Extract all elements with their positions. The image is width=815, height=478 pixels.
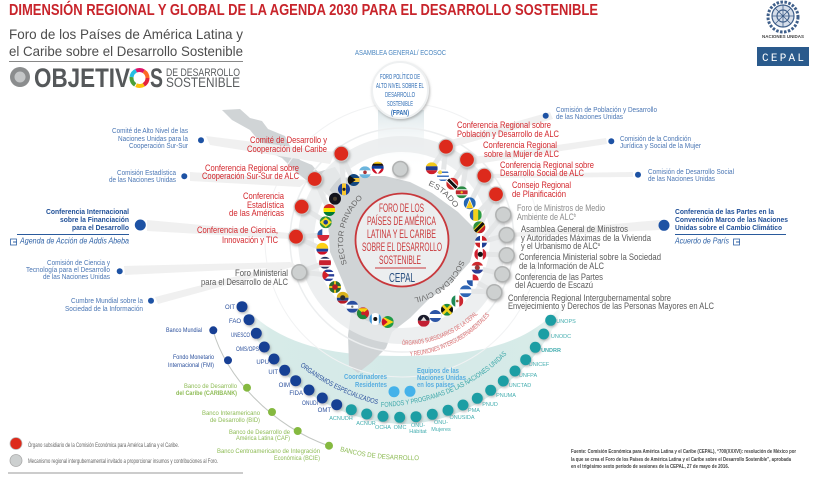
left blue labels: Comisión de Ciencia y xyxy=(47,260,110,267)
flags of member countries: right arc xyxy=(418,162,487,327)
left blue labels: Naciones Unidas para la xyxy=(118,136,188,143)
connecting rays to global bodies xyxy=(124,112,660,304)
grey labels: right: y Autoridades Máximas de la Vivienda xyxy=(521,233,652,244)
red labels: right: Población y Desarrollo de ALC xyxy=(457,129,559,140)
labels: fondos y programas: FONDOS Y PROGRAMAS DE LAS NACIONES UNIDAS xyxy=(381,352,506,407)
left blue labels: Comisión Estadística xyxy=(117,170,176,177)
right blue labels: Comisión de Desarrollo Social xyxy=(648,169,734,176)
red labels: left: Conferencia Regional sobre xyxy=(205,163,299,174)
spokes from flags to nodes xyxy=(296,147,507,292)
grey labels: right: y el Urbanismo de ALC xyxy=(521,241,618,252)
grey labels: right: b xyxy=(574,213,576,219)
callout: Conferencia Internacional sobre la Financiación xyxy=(10,207,129,246)
FPAN circle: DESARROLLO xyxy=(385,90,415,99)
callout: Conferencia Internacional sobre la Financiación: para el Desarrollo xyxy=(72,223,129,232)
labels: bancos de desarrollo: de Desarrollo (BID) xyxy=(210,417,260,424)
labels: coordinadores y equipos: Equipos de las xyxy=(417,366,459,375)
labels: bancos de desarrollo: Fondo Monetario xyxy=(173,355,215,361)
labels: fondos y programas xyxy=(329,319,576,435)
grey labels: right: Conferencia de las Partes xyxy=(515,272,603,283)
label: Asamblea General / ECOSOC: ASAMBLEA GENERAL/ ECOSOC xyxy=(355,50,446,57)
flags of member countries: left arc xyxy=(316,162,394,328)
grey labels: right: Conferencia Regional Intergubernamental sobre xyxy=(508,293,671,304)
labels: organismos especializados: OMT xyxy=(318,408,331,414)
red nodes: órganos subsidiarios xyxy=(288,139,504,244)
labels: fondos y programas: OMC xyxy=(394,425,406,431)
FPAN band xyxy=(378,110,424,170)
grey labels: right: a xyxy=(598,242,600,248)
logo: CEPAL: CEPAL xyxy=(762,53,804,65)
FPAN circle: FORO POLÍTICO DE xyxy=(380,72,420,81)
logo: CEPAL xyxy=(757,47,809,66)
labels: coordinadores y equipos: Residentes xyxy=(355,380,387,389)
labels: fondos y programas: ONUSIDA xyxy=(449,415,475,421)
source note xyxy=(571,449,797,470)
central circle: Foro de los Países xyxy=(356,194,448,286)
subtitle: el Caribe sobre el Desarrollo Sostenible xyxy=(9,43,243,59)
red labels: left: Comité de Desarrollo y xyxy=(250,135,327,146)
labels: fondos y programas: UNICEF xyxy=(529,362,550,368)
grey label: Foro Ministerial xyxy=(201,268,288,288)
right blue labels: de las Naciones Unidas xyxy=(648,176,715,183)
grey labels: right: de la Información de ALC xyxy=(519,261,604,272)
logo: objetivos de desarrollo sostenible: S xyxy=(150,63,163,93)
labels: organismos especializados: ONUDI xyxy=(302,401,318,407)
bank nodes xyxy=(209,326,333,450)
small blue dots: global bodies xyxy=(117,113,669,304)
right blue labels: Comisión de Población y Desarrollo xyxy=(556,107,657,114)
left blue labels: Cumbre Mundial sobre la xyxy=(71,298,143,305)
central circle: Foro de los Países: PAÍSES DE AMÉRICA xyxy=(367,213,436,228)
right blue labels: Jurídica y Social de la Mujer xyxy=(620,143,702,150)
FPAN circle: ALTO NIVEL SOBRE EL xyxy=(376,81,424,90)
left blue labels: Sociedad de la Información xyxy=(65,306,143,313)
ring labels: sectors: SECTOR PRIVADO xyxy=(338,196,362,265)
grey labels: right xyxy=(508,203,714,312)
grey labels: right: Conferencia Ministerial sobre la Sociedad xyxy=(519,252,661,263)
central circle: Foro de los Países: LATINA Y EL CARIBE xyxy=(367,227,436,241)
grey label: Foro Ministerial: Foro Ministerial xyxy=(235,268,288,279)
red labels: right: de Planificación xyxy=(512,189,566,200)
teal nodes: fondos y programas xyxy=(346,315,556,423)
grey nodes: mecanismos regionales xyxy=(292,162,514,300)
logo: Naciones Unidas xyxy=(762,2,804,39)
labels: coordinadores y equipos: en los países xyxy=(417,380,454,389)
right blue labels: de las Naciones Unidas xyxy=(556,114,623,121)
labels: bancos de desarrollo xyxy=(166,328,419,462)
FPAN circle xyxy=(372,62,428,118)
grey labels: right: Ambiente de ALC xyxy=(517,212,591,223)
logo: Naciones Unidas: NACIONES UNIDAS xyxy=(762,34,804,39)
red labels: left: Estadística xyxy=(247,200,285,211)
labels: fondos y programas: OCHA xyxy=(375,425,391,431)
red labels: left xyxy=(197,135,327,246)
red labels: left: de las Américas xyxy=(229,208,284,219)
labels: fondos y programas: UNODC xyxy=(551,334,571,340)
red labels: left: Innovación y TIC xyxy=(222,235,278,246)
labels: organismos especializados: UNESCO xyxy=(231,333,250,339)
labels: fondos y programas: ONU- xyxy=(434,420,448,426)
bottom crescent xyxy=(238,300,566,424)
concentric rings xyxy=(265,103,539,377)
central circle: Foro de los Países: SOSTENIBLE xyxy=(379,253,421,267)
red labels: left: Cooperación Sur-Sur de ALC xyxy=(202,171,299,182)
grey labels: right: del Acuerdo de Escazú xyxy=(515,280,593,291)
labels: bancos de desarrollo: Banco Centroamericano de Integración xyxy=(217,448,320,455)
right blue labels xyxy=(556,107,734,183)
logo: objetivos de desarrollo sostenible xyxy=(10,63,240,93)
labels: fondos y programas: ONU- xyxy=(411,423,425,429)
labels: fondos y programas: PNUD xyxy=(482,402,498,408)
grey labels: right: Foro de Ministros de Medio xyxy=(517,203,605,214)
labels: organismos especializados: OMS/OPS xyxy=(236,347,259,353)
red labels: right: Conferencia Regional xyxy=(483,140,557,151)
labels: fondos y programas: Hábitat xyxy=(409,429,427,435)
red labels: right: Conferencia Regional sobre xyxy=(457,120,551,131)
labels: bancos de desarrollo: Económica (BCIE) xyxy=(274,455,320,462)
red labels: right: Conferencia Regional sobre xyxy=(500,160,594,171)
callout: Conferencia de las Partes, Cambio Climático xyxy=(674,207,788,246)
logo: objetivos de desarrollo sostenible: SOSTENIBLE xyxy=(166,75,240,90)
red labels: right xyxy=(457,120,594,200)
grey labels: right: Asamblea General de Ministros xyxy=(521,224,628,235)
bank arc line xyxy=(213,330,329,446)
callout: Conferencia de las Partes, Cambio Climático: Conferencia de las Partes en la xyxy=(675,207,775,216)
grey labels: right: Envejecimiento y Derechos de las Personas Mayores en ALC xyxy=(508,301,714,312)
labels: bancos de desarrollo: Internacional (FMI) xyxy=(168,363,214,369)
labels: fondos y programas: PNUMA xyxy=(496,393,516,399)
ring labels: sectors: SOCIEDAD CIVIL xyxy=(414,260,464,302)
labels: organismos especializados xyxy=(225,304,378,414)
labels: organismos especializados: UPU xyxy=(256,360,269,366)
logo: objetivos de desarrollo sostenible: DE DESARROLLO xyxy=(166,67,240,79)
left blue labels xyxy=(26,128,189,313)
labels: bancos de desarrollo: del Caribe (CARIBANK) xyxy=(176,390,237,397)
callout: Conferencia Internacional sobre la Financiación: sobre la Financiación xyxy=(60,215,129,224)
labels: fondos y programas: UNFPA xyxy=(519,373,537,379)
red labels: right: Consejo Regional xyxy=(512,180,571,191)
labels: bancos de desarrollo: Banco Interamericano xyxy=(202,410,260,417)
dark blue nodes: organismos especializados xyxy=(236,301,342,410)
labels: organismos especializados: OIM xyxy=(279,383,290,389)
labels: bancos de desarrollo: Banco Mundial xyxy=(166,328,202,334)
light blue nodes: equipos en los países xyxy=(388,386,416,397)
callout: Conferencia Internacional sobre la Financiación: Agenda de Acción de Addis Abeba xyxy=(19,236,129,246)
labels: bancos de desarrollo: Banco de Desarrollo xyxy=(184,383,237,390)
callout: Conferencia de las Partes, Cambio Climático: Unidas sobre el Cambio Climático xyxy=(675,223,782,232)
FPAN circle: (FPAN) xyxy=(391,108,409,117)
labels: bancos de desarrollo: Banco de Desarrollo de xyxy=(229,429,290,436)
labels: organismos especializados: FIDA xyxy=(289,391,303,397)
arc label: órganos subsidiarios: Y REUNIONES INTERGUBERNAMENTALES xyxy=(410,312,490,356)
labels: fondos y programas: Mujeres xyxy=(431,427,451,433)
logo: objetivos de desarrollo sostenible: OBJETIV xyxy=(34,63,130,93)
source note: en el trigésimo sexto período de sesiones de la CEPAL, 27 de mayo de 2016. xyxy=(571,464,729,470)
red labels: left: Cooperación del Caribe xyxy=(247,144,327,155)
labels: coordinadores y equipos: Coordinadores xyxy=(344,372,387,381)
left blue labels: Cooperación Sur-Sur xyxy=(129,143,189,150)
labels: coordinadores y equipos: Naciones Unidas xyxy=(417,373,466,382)
labels: fondos y programas: UNCTAD xyxy=(509,383,531,389)
labels: bancos de desarrollo: América Latina (CAF) xyxy=(236,435,290,442)
labels: fondos y programas: UNDRR xyxy=(541,348,561,354)
arc label: órganos subsidiarios: ÓRGANOS SUBSIDIARIOS DE LA CEPAL xyxy=(402,312,478,345)
labels: fondos y programas: PMA xyxy=(468,408,480,414)
title: DIMENSIÓN REGIONAL Y GLOBAL DE LA AGENDA 2030 PARA EL DESARROLLO SOSTENIBLE xyxy=(9,1,598,19)
callout: Conferencia de las Partes, Cambio Climático: Acuerdo de París xyxy=(674,236,729,246)
right blue labels: Comisión de la Condición xyxy=(620,136,691,143)
labels: organismos especializados: UIT xyxy=(268,370,278,376)
red labels: right: sobre la Mujer de ALC xyxy=(484,149,559,160)
world map background xyxy=(222,109,478,373)
labels: fondos y programas: UNOPS xyxy=(556,319,576,325)
left blue labels: Comité de Alto Nivel de las xyxy=(112,128,188,135)
legend xyxy=(8,438,243,474)
central circle: Foro de los Países: CEPAL xyxy=(389,270,415,285)
FPAN circle: SOSTENIBLE xyxy=(387,99,413,108)
labels: organismos especializados: OIT xyxy=(225,305,235,311)
grey label: Foro Ministerial: para el Desarrollo de ALC xyxy=(201,277,288,288)
labels: fondos y programas: ACNUDH xyxy=(329,416,353,422)
red labels: left: Conferencia xyxy=(243,191,285,202)
red labels: right: Desarrollo Social de ALC xyxy=(500,168,584,179)
left blue labels: de las Naciones Unidas xyxy=(109,177,176,184)
legend: Mecanismo regional intergubernamental invitado a proporcionar insumos y contribuciones al Foro. xyxy=(28,459,218,465)
ring labels: sectors xyxy=(338,180,464,302)
labels: bancos de desarrollo: BANCOS DE DESARROLLO xyxy=(340,446,419,460)
labels: fondos y programas: ACNUR xyxy=(356,421,376,427)
subtitle: Foro de los Países de América Latina y xyxy=(9,26,243,42)
callout: Conferencia de las Partes, Cambio Climático: Convención Marco de las Naciones xyxy=(675,215,788,224)
callout: Conferencia Internacional sobre la Financiación: Conferencia Internacional xyxy=(46,207,129,216)
ring labels: sectors: ESTADO xyxy=(428,180,458,207)
labels: organismos especializados: ORGANISMOS ESPECIALIZADOS xyxy=(301,363,378,404)
central circle: Foro de los Países: FORO DE LOS xyxy=(379,201,424,215)
legend: Órgano subsidiario de la Comisión Económica para América Latina y el Caribe. xyxy=(28,442,179,449)
left blue labels: de las Naciones Unidas xyxy=(43,274,110,281)
labels: coordinadores y equipos xyxy=(344,366,466,389)
labels: organismos especializados: FAO xyxy=(229,319,241,325)
red labels: left: Conferencia de Ciencia, xyxy=(197,225,278,236)
left blue labels: Tecnología para el Desarrollo xyxy=(26,267,110,274)
central circle: Foro de los Países: SOBRE EL DESARROLLO xyxy=(362,240,442,254)
subtitle xyxy=(9,26,243,62)
